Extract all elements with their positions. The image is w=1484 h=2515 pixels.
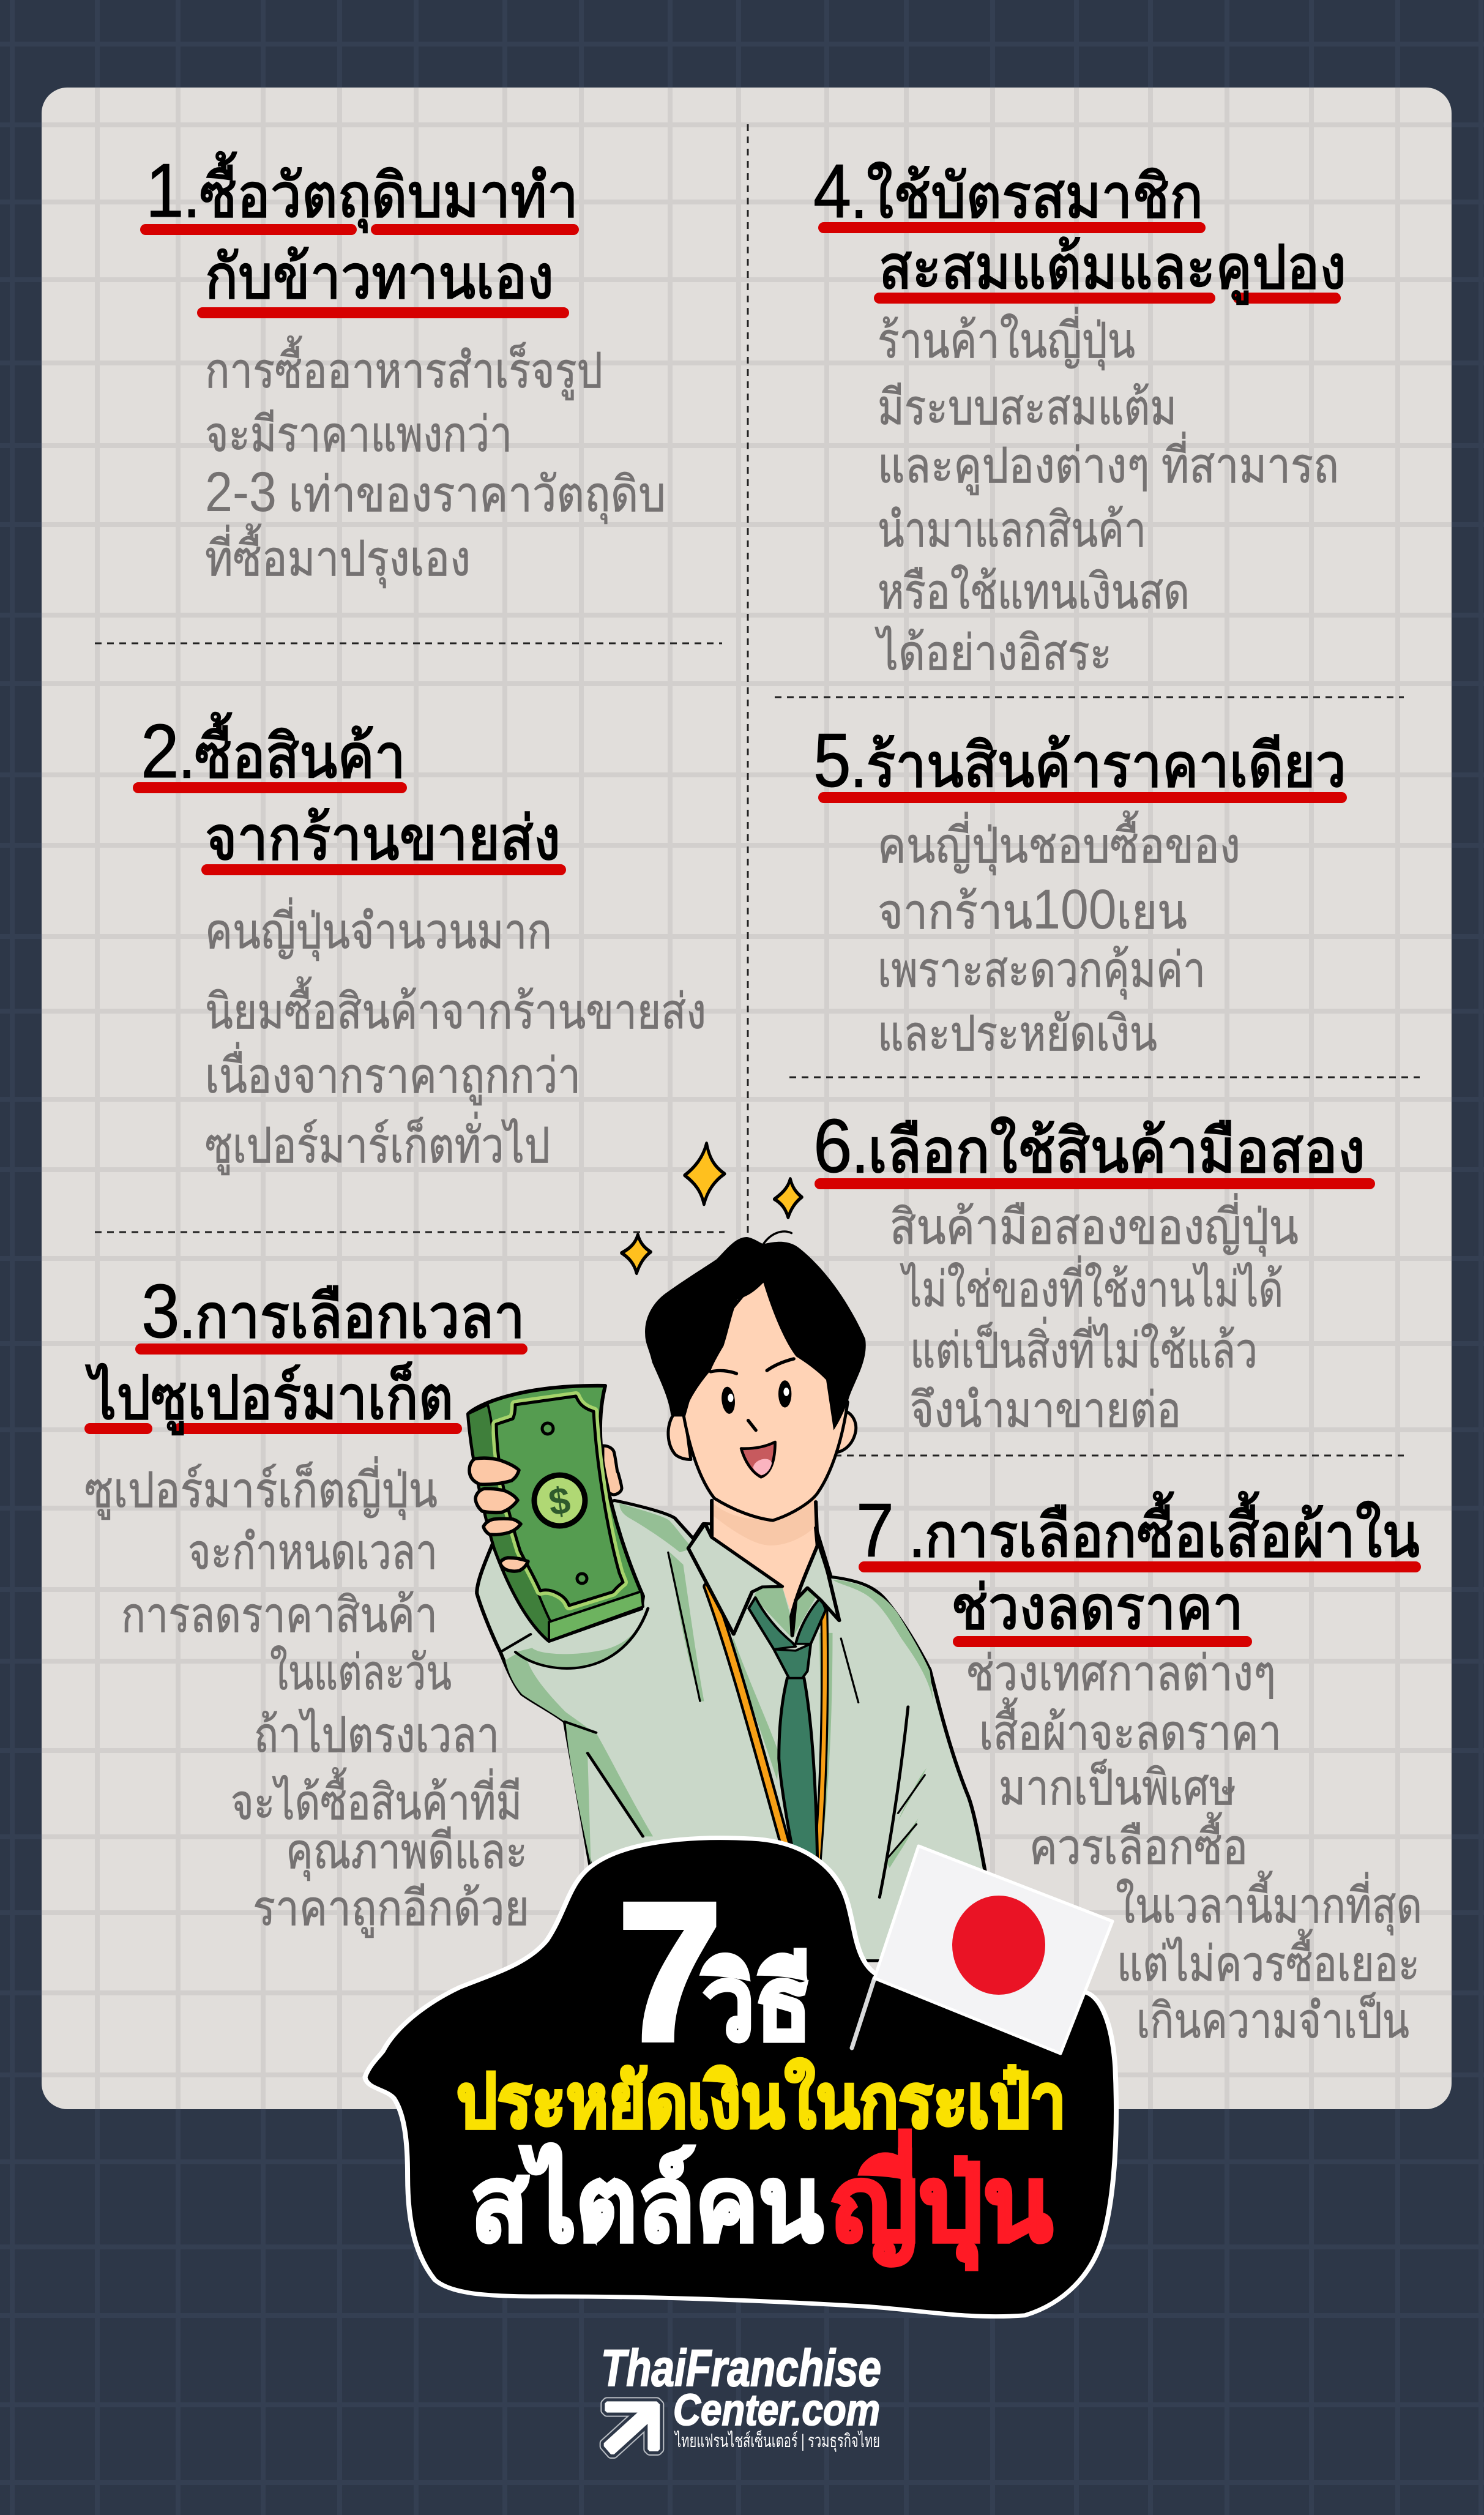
text: tip 3 body: ราคาถูกอีกด้วย: [253, 1881, 529, 1938]
text: tip 3 body: การลดราคาสินค้า: [121, 1588, 438, 1642]
title: วิธี: [701, 1946, 812, 2062]
text: tip 7 body: ช่วงเทศกาลต่างๆ: [966, 1646, 1276, 1700]
text: tip 3 body: จะกำหนดเวลา: [188, 1525, 438, 1579]
text: tip 4 body: มีระบบสะสมแต้ม: [878, 380, 1177, 435]
heading: tip 2: 2.ซื้อสินค้า: [141, 709, 406, 794]
panel: tip 2: [138, 709, 706, 1175]
heading: tip 7: 7 .การเลือกซื้อเสื้อผ้าใน: [856, 1489, 1420, 1573]
heading: tip 1: 1.ซื้อวัตถุดิบมาทำ: [146, 149, 578, 233]
logo: ThaiFranchise Center.com: ไทยแฟรนไชส์เซ็นเตอร์ | รวมธุรกิจไทย: [674, 2429, 880, 2453]
text: tip 5 body: จากร้าน100เยน: [878, 878, 1187, 941]
text: tip 1 body: ที่ซื้อมาปรุงเอง: [205, 523, 471, 588]
text: tip 4 body: และคูปองต่างๆ ที่สามารถ: [878, 432, 1339, 495]
title: ประหยัดเงินในกระเป๋า: [457, 2058, 1066, 2143]
text: tip 4 body: [874, 307, 1339, 680]
face: [684, 1271, 848, 1520]
icon: logo arrow: [604, 2401, 660, 2454]
text: tip 2 body: เนื่องจากราคาถูกกว่า: [205, 1042, 581, 1105]
neck: [712, 1497, 818, 1616]
panel: tip 3: [84, 1269, 529, 1938]
text: tip 5 body: และประหยัดเงิน: [878, 1006, 1157, 1061]
text: tip 6 body: จึงนำมาขายต่อ: [910, 1383, 1181, 1437]
text: tip 2 body: นิยมซื้อสินค้าจากร้านขายส่ง: [205, 976, 706, 1039]
mouth: [741, 1442, 775, 1477]
text: tip 1 body: [205, 335, 666, 588]
text: tip 2 body: [205, 898, 706, 1175]
text: tip 5 body: เพราะสะดวกคุ้มค่า: [878, 943, 1206, 1000]
head: [645, 1231, 866, 1520]
text: tip 1 body: จะมีราคาแพงกว่า: [205, 407, 512, 462]
panel: tip 4: [813, 149, 1346, 680]
text: tip 3 body: คุณภาพดีและ: [286, 1824, 528, 1881]
collar: [688, 1523, 839, 1635]
panel: paper sheet: [42, 88, 1452, 2109]
heading: tip 2: จากร้านขายส่ง: [205, 804, 561, 873]
text: tip 3 body: [84, 1457, 529, 1938]
text: tip 7 body: มากเป็นพิเศษ: [999, 1758, 1236, 1815]
heading: tip 5: 5.ร้านสินค้าราคาเดียว: [813, 719, 1346, 803]
text: tip 3 body: ถ้าไปตรงเวลา: [254, 1708, 499, 1762]
brows and nose: [710, 1359, 794, 1430]
panel: tip 5: [813, 719, 1346, 1061]
text: tip 6 body: แต่เป็นสิ่งที่ไม่ใช้แล้ว: [910, 1317, 1258, 1378]
text: tip 2 body: คนญี่ปุ่นจำนวนมาก: [205, 898, 552, 961]
heading: tip 1: กับข้าวทานเอง: [205, 243, 554, 312]
hair flick: [763, 1231, 791, 1244]
heading: tip 4: [813, 149, 1346, 304]
heading: tip 6: 6.เลือกใช้สินค้ามือสอง: [813, 1104, 1365, 1189]
panel: tip 1: [146, 149, 666, 588]
text: tip 3 body: จะได้ซื้อสินค้าที่มี: [231, 1767, 522, 1829]
text: tip 7 body: เสื้อผ้าจะลดราคา: [979, 1697, 1281, 1760]
hand thumb: [603, 1446, 622, 1495]
text: tip 5 body: คนญี่ปุ่นชอบซื้อของ: [878, 810, 1240, 875]
heading: tip 1: [146, 149, 578, 313]
heading: tip 4: สะสมแต้มและคูปอง: [879, 233, 1346, 304]
ears: [668, 1410, 856, 1460]
illustration: man holding money: [468, 1143, 1002, 1961]
heading: tip 3: [86, 1269, 525, 1435]
hair: [645, 1237, 866, 1430]
text: tip 6 body: [890, 1194, 1299, 1437]
hand fingers: [469, 1458, 528, 1571]
icon: sparkles: [622, 1143, 802, 1273]
text: tip 7 body: แต่ไม่ควรซื้อเยอะ: [1117, 1929, 1420, 1991]
heading: tip 2: [138, 709, 561, 873]
logo: ThaiFranchise Center.com: ThaiFranchise: [601, 2339, 881, 2397]
heading: tip 7: [856, 1489, 1420, 1642]
text: tip 6 body: สินค้ามือสองของญี่ปุ่น: [890, 1194, 1299, 1257]
text: tip 4 body: หรือใช้แทนเงินสด: [878, 564, 1190, 619]
banner: black blob: [365, 1838, 1116, 2317]
text: tip 7 body: ควรเลือกซื้อ: [1029, 1812, 1248, 1874]
panel: tip 6: [813, 1104, 1370, 1437]
text: tip 1 body: การซื้ออาหารสำเร็จรูป: [205, 335, 603, 400]
text: tip 7 body: เกินความจำเป็น: [1136, 1992, 1409, 2048]
title: 7: [618, 1862, 721, 2081]
logo: ThaiFranchise Center.com: [601, 2339, 881, 2454]
text: tip 1 body: 2-3 เท่าของราคาวัตถุดิบ: [205, 461, 666, 524]
tie and lanyard: [709, 1545, 826, 1865]
shirt: [477, 1500, 1002, 1961]
panel: tip 7: [856, 1489, 1422, 2048]
text: tip 4 body: นำมาแลกสินค้า: [878, 503, 1146, 557]
icon: Japan flag: [852, 1846, 1113, 2053]
dollar sign: $: [546, 1479, 573, 1524]
text: tip 4 body: ได้อย่างอิสระ: [874, 626, 1112, 680]
title: [457, 1862, 1066, 2270]
heading: tip 4: 4.ใช้บัตรสมาชิก: [813, 149, 1203, 234]
title: ญี่ปุ่น: [831, 2130, 1053, 2270]
text: tip 2 body: ซูเปอร์มาร์เก็ตทั่วไป: [205, 1112, 550, 1175]
eyes: [720, 1380, 791, 1414]
text: tip 3 body: ในแต่ละวัน: [270, 1645, 452, 1700]
text: tip 3 body: ซูเปอร์มาร์เก็ตญี่ปุ่น: [84, 1457, 438, 1520]
text: tip 7 body: [966, 1646, 1422, 2048]
heading: tip 3: 3.การเลือกเวลา: [141, 1269, 525, 1354]
heading: tip 3: ไปซูเปอร์มาเก็ต: [86, 1361, 453, 1435]
text: tip 7 body: ในเวลานี้มากที่สุด: [1116, 1870, 1422, 1935]
logo: ThaiFranchise Center.com: Center.com: [673, 2386, 880, 2435]
heading: tip 7: ช่วงลดราคา: [951, 1574, 1244, 1642]
text: tip 6 body: ไม่ใช่ของที่ใช้งานไม่ได้: [900, 1256, 1283, 1317]
text: tip 4 body: ร้านค้าในญี่ปุ่น: [878, 307, 1135, 370]
text: tip 5 body: [878, 810, 1240, 1061]
money stack: [468, 1386, 643, 1641]
title: สไตล์คน: [471, 2144, 823, 2263]
